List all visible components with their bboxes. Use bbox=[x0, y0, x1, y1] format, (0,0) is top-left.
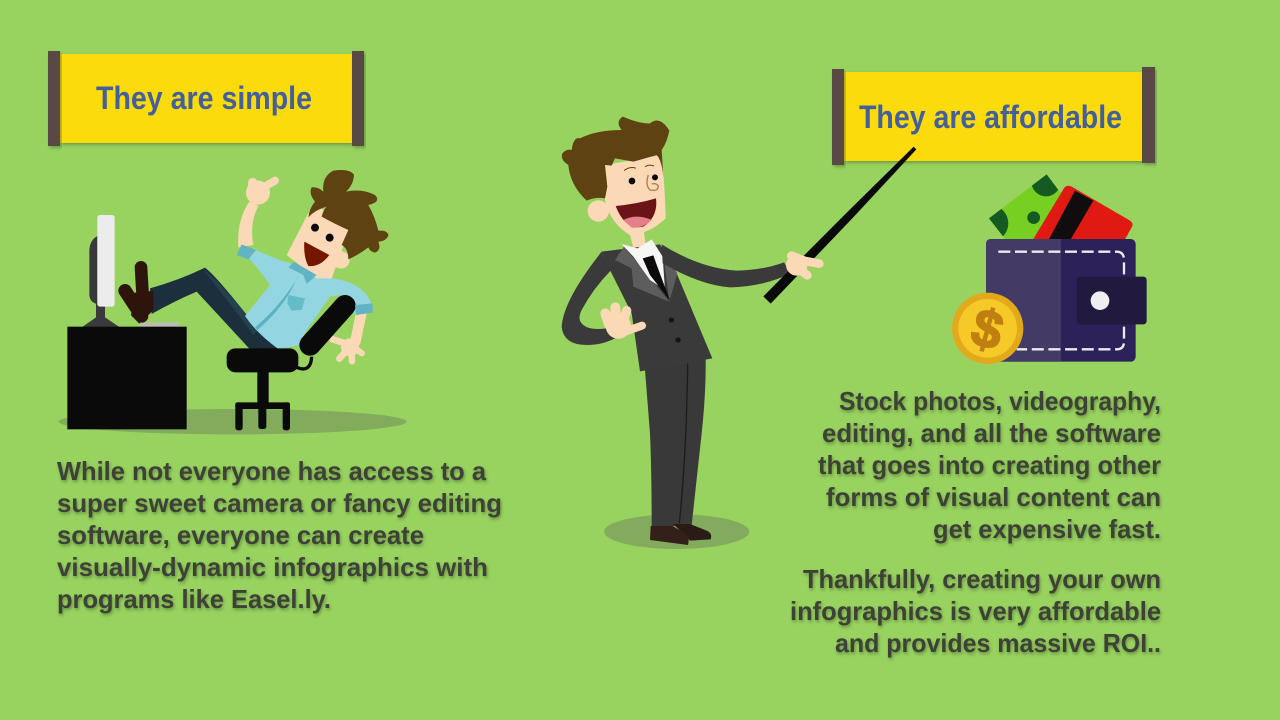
body text: affordable, paragraph one: forms of visual content can bbox=[826, 482, 1161, 512]
wallet bbox=[986, 239, 1147, 362]
lower arm and spread hand bbox=[333, 312, 362, 361]
body text: simple: programs like Easel.ly. bbox=[57, 584, 331, 614]
head bbox=[287, 170, 388, 284]
banner: They are simple bbox=[48, 51, 364, 146]
jacket bbox=[602, 239, 712, 371]
floor shadow bbox=[604, 514, 749, 549]
trousers bbox=[150, 268, 281, 349]
banner: They are affordable: They are affordable bbox=[859, 99, 1122, 135]
body text: simple: While not everyone has access to a bbox=[57, 456, 487, 486]
illustration: man relaxing at desk bbox=[59, 170, 407, 434]
chair back bbox=[310, 306, 345, 345]
pointing hand bbox=[786, 254, 819, 276]
coin bbox=[952, 293, 1023, 364]
raised arm and thumbs-up hand bbox=[238, 181, 275, 247]
body text: affordable, paragraph two: and provides massive ROI.. bbox=[835, 628, 1161, 658]
sleeves bbox=[237, 244, 373, 315]
pointer stick bbox=[763, 147, 916, 304]
body text: affordable, paragraph one: editing, and all the software bbox=[822, 418, 1161, 448]
floor shadow bbox=[59, 409, 407, 434]
shoes bbox=[650, 524, 711, 545]
neck bbox=[629, 232, 646, 248]
illustration: wallet with cash, card and coin bbox=[952, 167, 1147, 364]
waving hand bbox=[605, 307, 642, 339]
body text: simple bbox=[57, 456, 502, 614]
body text: affordable, paragraph one: that goes into creating other bbox=[818, 450, 1161, 480]
banner: They are affordable bbox=[832, 67, 1155, 165]
left arm bbox=[562, 252, 617, 345]
body text: affordable, paragraph two bbox=[790, 564, 1161, 658]
cash bbox=[989, 174, 1061, 239]
body text: simple: software, everyone can create bbox=[57, 520, 424, 550]
card bbox=[1027, 186, 1133, 260]
head bbox=[562, 117, 669, 235]
illustration: presenter with pointer bbox=[562, 117, 916, 549]
body text: affordable, paragraph one: get expensive fast. bbox=[933, 514, 1161, 544]
person bbox=[125, 170, 388, 372]
shirt bbox=[245, 249, 372, 349]
body text: affordable, paragraph one bbox=[818, 386, 1161, 544]
trousers bbox=[645, 359, 706, 527]
shoes bbox=[125, 267, 153, 323]
chair base and seat bbox=[235, 357, 312, 430]
body text: affordable, paragraph two: infographics is very affordable bbox=[790, 596, 1161, 626]
desk and monitor bbox=[67, 215, 187, 429]
seat bbox=[227, 348, 298, 372]
body text: affordable, paragraph two: Thankfully, creating your own bbox=[803, 564, 1161, 594]
coin: $ bbox=[965, 297, 1009, 362]
body text: affordable, paragraph one: Stock photos, videography, bbox=[839, 386, 1161, 416]
banner: They are simple: They are simple bbox=[96, 80, 312, 116]
body text: simple: super sweet camera or fancy editing bbox=[57, 488, 502, 518]
right arm bbox=[662, 244, 791, 287]
body text: simple: visually-dynamic infographics with bbox=[57, 552, 488, 582]
